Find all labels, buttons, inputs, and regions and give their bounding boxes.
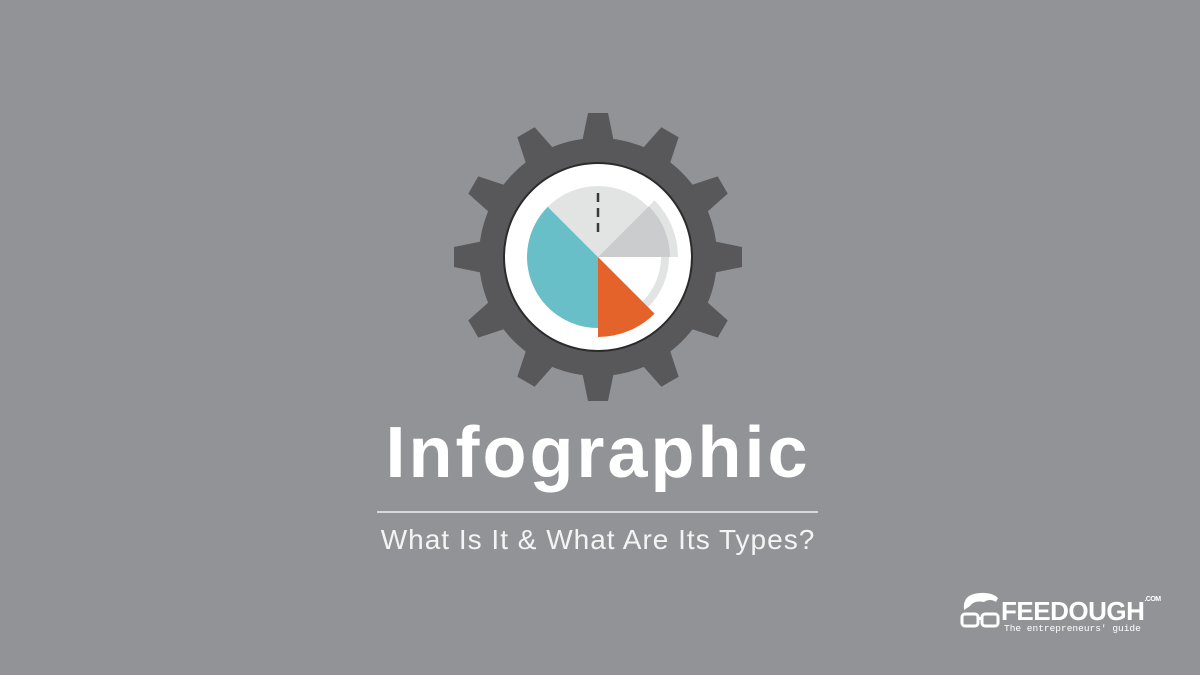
tagline: The entrepreneurs' guide <box>1004 623 1141 634</box>
logo: feedough <box>960 592 1161 634</box>
subtitle: What Is It & What Are Its Types? <box>381 524 815 555</box>
divider line <box>377 511 818 513</box>
icon: face with glasses <box>960 592 1000 628</box>
title: Infographic <box>386 413 810 493</box>
brand name: FEEDOUGH.COM <box>1001 596 1161 626</box>
